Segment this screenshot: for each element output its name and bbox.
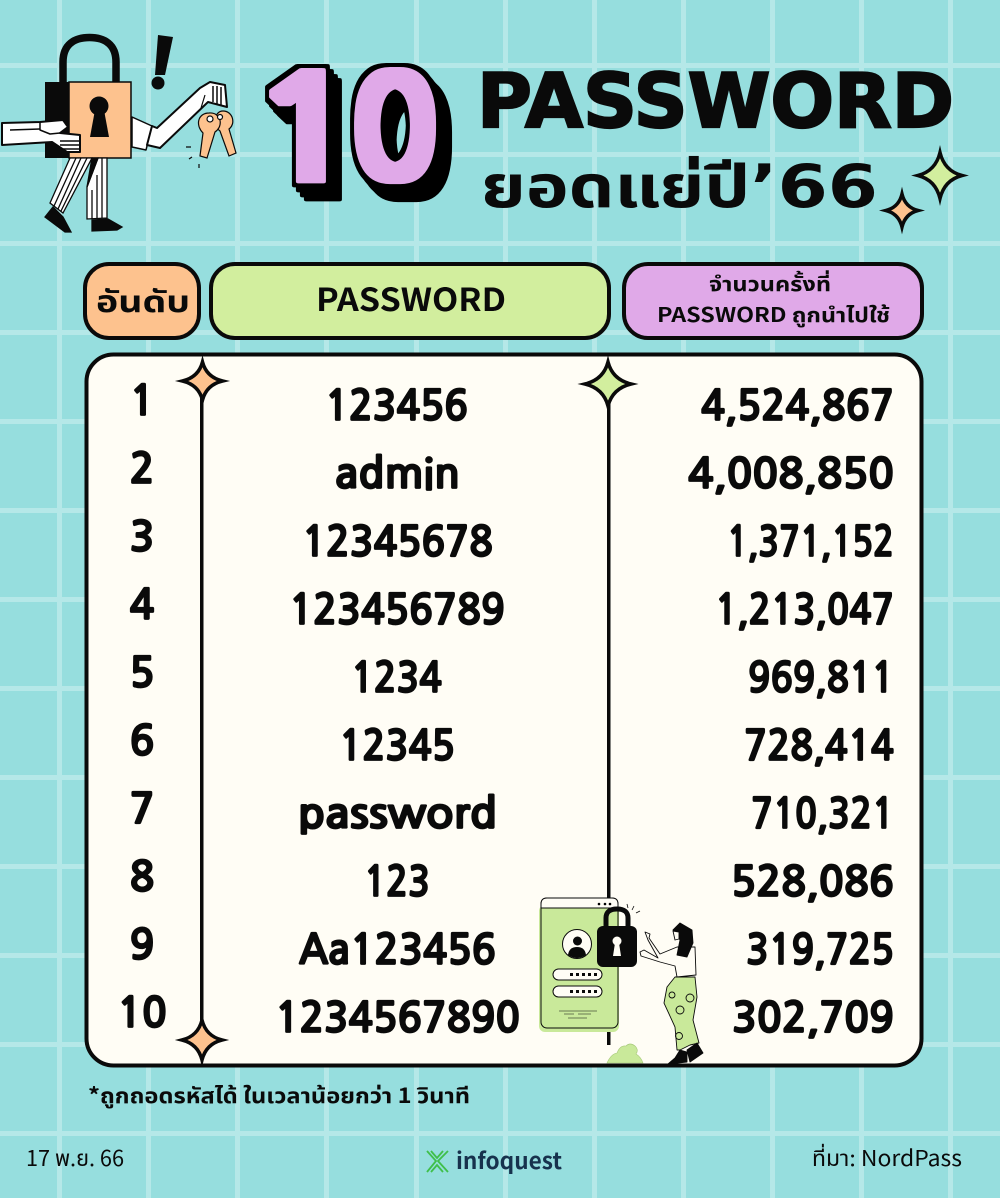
- password column: admin: [335, 455, 460, 495]
- rank numbers: 1: [130, 382, 154, 422]
- password column: Aa123456: [299, 931, 496, 971]
- footer source: ที่มา: NordPass: [812, 1141, 962, 1173]
- table header: usage count: จำนวนครั้งที่: [709, 268, 831, 297]
- icon: padlock body: [45, 82, 131, 158]
- icon: phone login screen: [539, 898, 619, 1032]
- rank numbers: 7: [130, 790, 154, 830]
- usage count column: 302,709: [732, 999, 894, 1039]
- icon: bush: [607, 1044, 643, 1063]
- rank numbers: 4: [130, 586, 154, 626]
- usage count column: [688, 387, 894, 1039]
- icon: padlock: [597, 904, 640, 967]
- rank numbers: 3: [130, 518, 154, 558]
- title: big number 10: 0: [351, 60, 438, 202]
- password column: 1234: [351, 659, 442, 699]
- password column: 123: [364, 863, 430, 903]
- column divider left: [200, 385, 204, 1025]
- table header: password: PASSWORD: [316, 275, 506, 321]
- illustration: login screen, padlock and woman: [539, 898, 703, 1064]
- rank numbers: 8: [130, 858, 154, 898]
- password column: 1234567890: [275, 999, 520, 1039]
- icon: infoquest mark: [427, 1151, 448, 1172]
- password column: 123456789: [289, 591, 505, 631]
- usage count column: 4,524,867: [701, 387, 894, 427]
- icon: woman: [640, 923, 703, 1064]
- footnote: *ถูกถอดรหัสได้ ในเวลาน้อยกว่า 1 วินาที: [88, 1080, 470, 1110]
- title: big number 10: [250, 59, 438, 202]
- usage count column: 4,008,850: [688, 455, 894, 495]
- icon: green sparkle: [918, 152, 962, 198]
- usage count column: 969,811: [748, 659, 894, 699]
- logo: infoquest: infoquest: [456, 1142, 562, 1176]
- sparkle: top left: [182, 362, 222, 400]
- usage count column: 1,371,152: [727, 523, 894, 563]
- footer date: 17 พ.ย. 66: [26, 1141, 124, 1173]
- table header: rank: อันดับ: [96, 277, 190, 321]
- sparkle: bottom left: [182, 1020, 222, 1060]
- table panel: [86, 354, 922, 1066]
- rank numbers: 10: [117, 994, 167, 1034]
- icon: left arm and hand: [2, 120, 80, 152]
- password column: [275, 387, 520, 1039]
- title: Thai subtitle: ยอดแย่ปี’66: [481, 152, 878, 222]
- icon: exclamation mark: [152, 35, 173, 90]
- password column: 123456: [325, 387, 468, 427]
- icon: padlock shackle: [63, 38, 116, 84]
- column divider right: [607, 390, 610, 1045]
- rank numbers: 9: [130, 926, 154, 966]
- table header: rank: [85, 264, 199, 338]
- table header: password: [211, 264, 609, 338]
- rank numbers: 6: [130, 722, 154, 762]
- table header: usage count: [624, 264, 922, 338]
- password column: password: [298, 795, 497, 835]
- rank numbers: 5: [130, 654, 154, 694]
- rank numbers: 2: [130, 450, 154, 490]
- icon: striped legs: [45, 158, 122, 232]
- usage count column: 710,321: [751, 795, 894, 835]
- usage count column: 1,213,047: [715, 591, 894, 631]
- icon: peach sparkle: [886, 194, 918, 227]
- illustration: padlock character holding keys: [2, 35, 236, 232]
- rank numbers: [117, 382, 167, 1034]
- password column: 12345: [339, 727, 455, 767]
- icon: keys: [186, 95, 236, 168]
- password column: 12345678: [302, 523, 493, 563]
- usage count column: 728,414: [744, 727, 894, 767]
- icon: right arm holding keys: [132, 82, 227, 150]
- table header: usage count: PASSWORD ถูกนำไปใช้: [657, 299, 890, 328]
- usage count column: 528,086: [731, 863, 894, 903]
- sparkle: top right: [585, 362, 631, 406]
- usage count column: 319,725: [746, 931, 894, 971]
- title: PASSWORD: PASSWORD: [477, 57, 954, 145]
- title: big number 10: 1: [250, 59, 363, 202]
